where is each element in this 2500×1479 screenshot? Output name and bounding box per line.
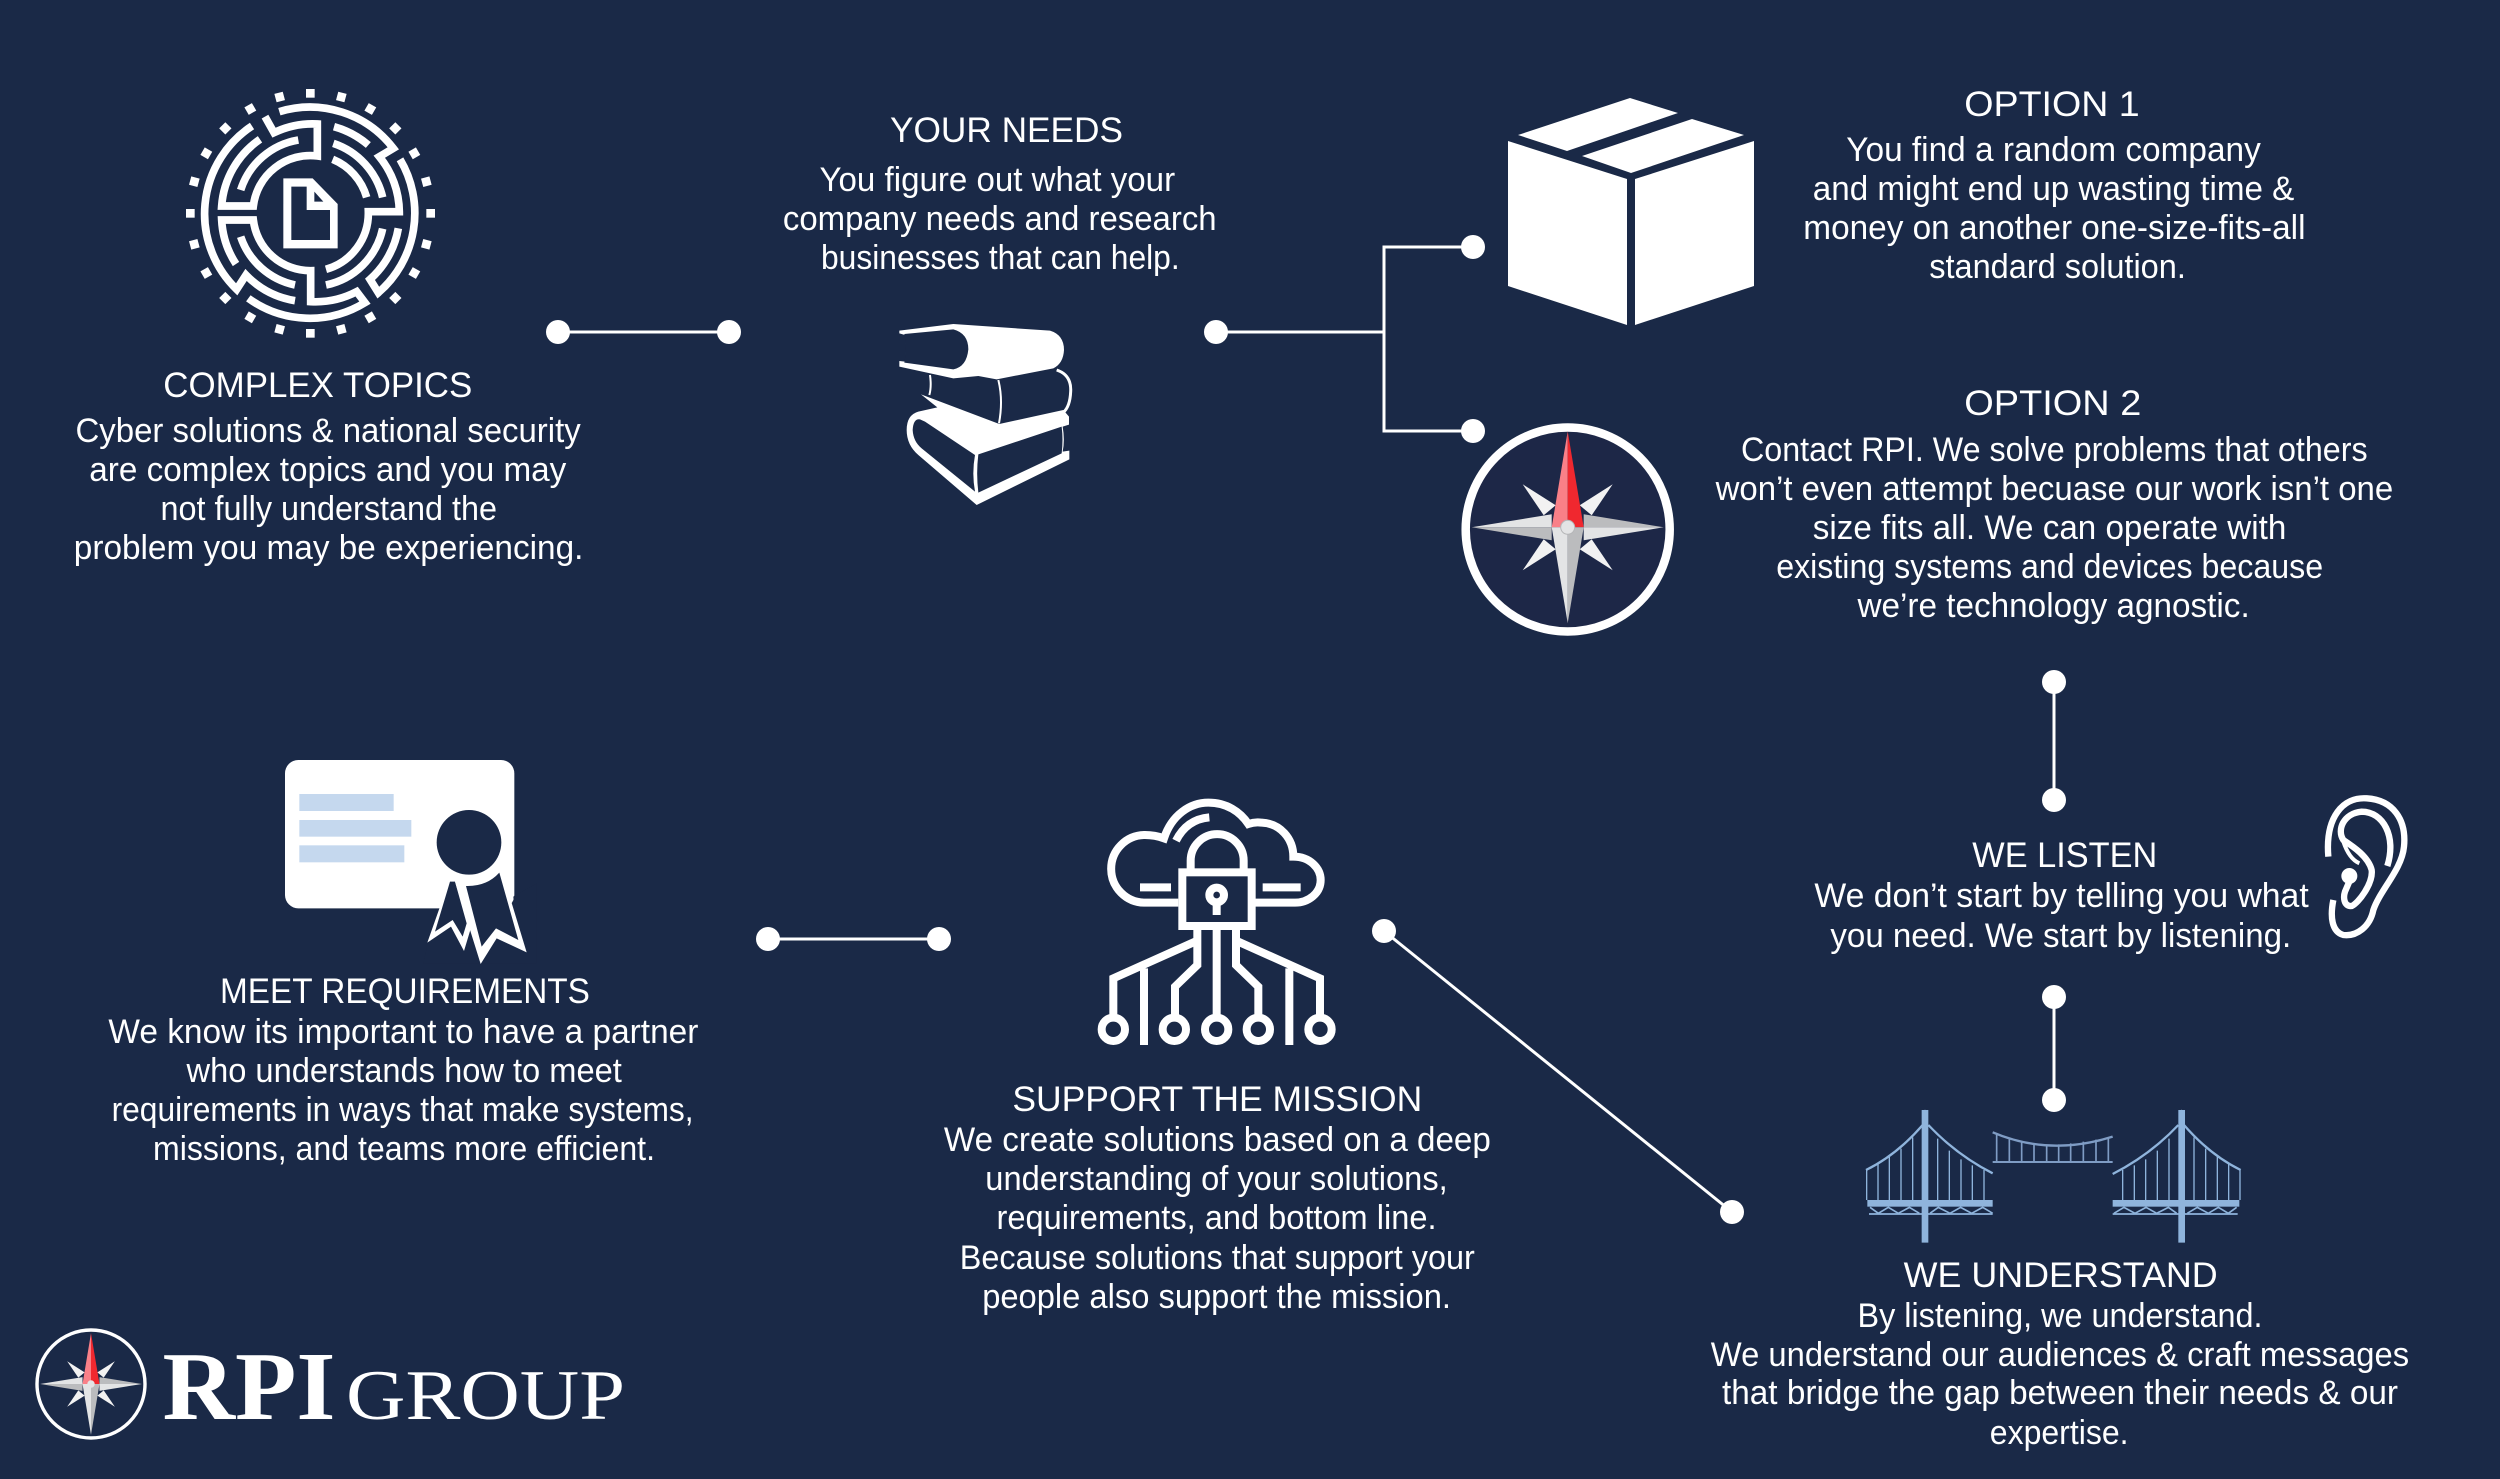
text: complex topics body: Cyber solutions & national security xyxy=(76,412,581,450)
text: RPI wordmark: RPI xyxy=(162,1333,336,1440)
text: support the mission body: requirements, and bottom line. xyxy=(996,1199,1436,1237)
text: meet requirements body xyxy=(108,1013,698,1168)
text: we understand body: By listening, we understand. xyxy=(1858,1297,2262,1335)
text: we listen body: you need. We start by listening. xyxy=(1830,917,2291,955)
text: option 2 body: won’t even attempt becuase our work isn’t one xyxy=(1715,470,2393,508)
text: option 2 body: we’re technology agnostic. xyxy=(1857,587,2250,625)
text: option 2 body: size fits all. We can operate with xyxy=(1813,509,2286,547)
text: complex topics body xyxy=(74,412,583,567)
icon: cardboard box xyxy=(1508,98,1754,325)
icon: compass xyxy=(1466,428,1670,632)
arrow: option 2 to we listen xyxy=(2042,670,2066,812)
heading: complex topics: COMPLEX TOPICS xyxy=(163,366,472,405)
panel: option 2 xyxy=(1715,384,2393,625)
panel: your needs xyxy=(783,111,1217,505)
text: option 1 body xyxy=(1803,131,2306,286)
text: we understand body xyxy=(1711,1297,2409,1452)
text: we understand body: that bridge the gap between their needs & our xyxy=(1722,1374,2398,1412)
panel: we listen xyxy=(1814,798,2404,955)
icon: certificate with ribbon xyxy=(285,760,537,964)
icon: logo compass xyxy=(37,1330,145,1438)
text: support the mission body: Because solutions that support your xyxy=(960,1239,1475,1277)
text: complex topics body: problem you may be experiencing. xyxy=(74,529,583,567)
text: meet requirements body: We know its important to have a partner xyxy=(108,1013,698,1051)
text: we understand body: expertise. xyxy=(1990,1414,2128,1452)
heading: option 1: OPTION 1 xyxy=(1964,85,2140,124)
panel: we understand xyxy=(1711,1256,2409,1452)
text: support the mission body: understanding of your solutions, xyxy=(985,1160,1448,1198)
heading: your needs: YOUR NEEDS xyxy=(890,111,1123,150)
arrow: we understand to support the mission xyxy=(1372,919,1744,1224)
heading: we understand: WE UNDERSTAND xyxy=(1904,1256,2218,1295)
text: option 2 body xyxy=(1715,431,2393,625)
panel: option 1 xyxy=(1803,85,2306,286)
text: support the mission body xyxy=(944,1121,1491,1316)
icon: maze with document xyxy=(186,89,435,338)
text: your needs body: You figure out what your xyxy=(820,161,1175,199)
text: we understand body: We understand our audiences & craft messages xyxy=(1711,1336,2409,1374)
text: your needs body: company needs and research xyxy=(783,200,1217,238)
heading: we listen: WE LISTEN xyxy=(1972,836,2157,875)
text: option 1 body: standard solution. xyxy=(1929,248,2186,286)
icon: broken bridge xyxy=(1866,1109,2241,1243)
panel: complex topics xyxy=(74,89,583,567)
text: complex topics body: are complex topics and you may xyxy=(89,451,566,489)
text: we listen body: We don’t start by telling you what xyxy=(1814,877,2309,915)
arrow: support the mission to meet requirements xyxy=(756,927,951,951)
panel: support the mission xyxy=(944,803,1491,1316)
text: we listen body xyxy=(1814,877,2309,955)
heading: option 2: OPTION 2 xyxy=(1964,384,2141,423)
text: your needs body xyxy=(783,161,1217,277)
heading: support the mission: SUPPORT THE MISSION xyxy=(1012,1080,1422,1119)
text: GROUP wordmark: GROUP xyxy=(346,1357,625,1435)
arrow: complex topics to your needs xyxy=(546,320,741,344)
text: support the mission body: people also support the mission. xyxy=(982,1278,1451,1316)
logo: RPI Group xyxy=(37,1330,625,1440)
heading: meet requirements: MEET REQUIREMENTS xyxy=(220,972,590,1011)
text: support the mission body: We create solutions based on a deep xyxy=(944,1121,1491,1159)
text: option 1 body: money on another one-size-fits-all xyxy=(1803,209,2306,247)
text: meet requirements body: who understands how to meet xyxy=(186,1052,622,1090)
arrow: your needs branching to options xyxy=(1204,235,1485,443)
text: option 1 body: and might end up wasting time & xyxy=(1813,170,2295,208)
text: meet requirements body: requirements in ways that make systems, xyxy=(112,1091,694,1129)
arrow: we listen to we understand xyxy=(2042,985,2066,1112)
text: option 2 body: existing systems and devices because xyxy=(1776,548,2323,586)
text: your needs body: businesses that can help. xyxy=(821,239,1180,277)
panel: meet requirements xyxy=(108,760,698,1168)
text: meet requirements body: missions, and teams more efficient. xyxy=(153,1130,655,1168)
icon: stack of books xyxy=(899,324,1071,505)
text: option 1 body: You find a random company xyxy=(1846,131,2261,169)
icon: cloud lock circuit xyxy=(1102,803,1332,1045)
text: complex topics body: not fully understand the xyxy=(160,490,497,528)
text: option 2 body: Contact RPI. We solve problems that others xyxy=(1741,431,2368,469)
icon: ear xyxy=(2328,798,2404,935)
